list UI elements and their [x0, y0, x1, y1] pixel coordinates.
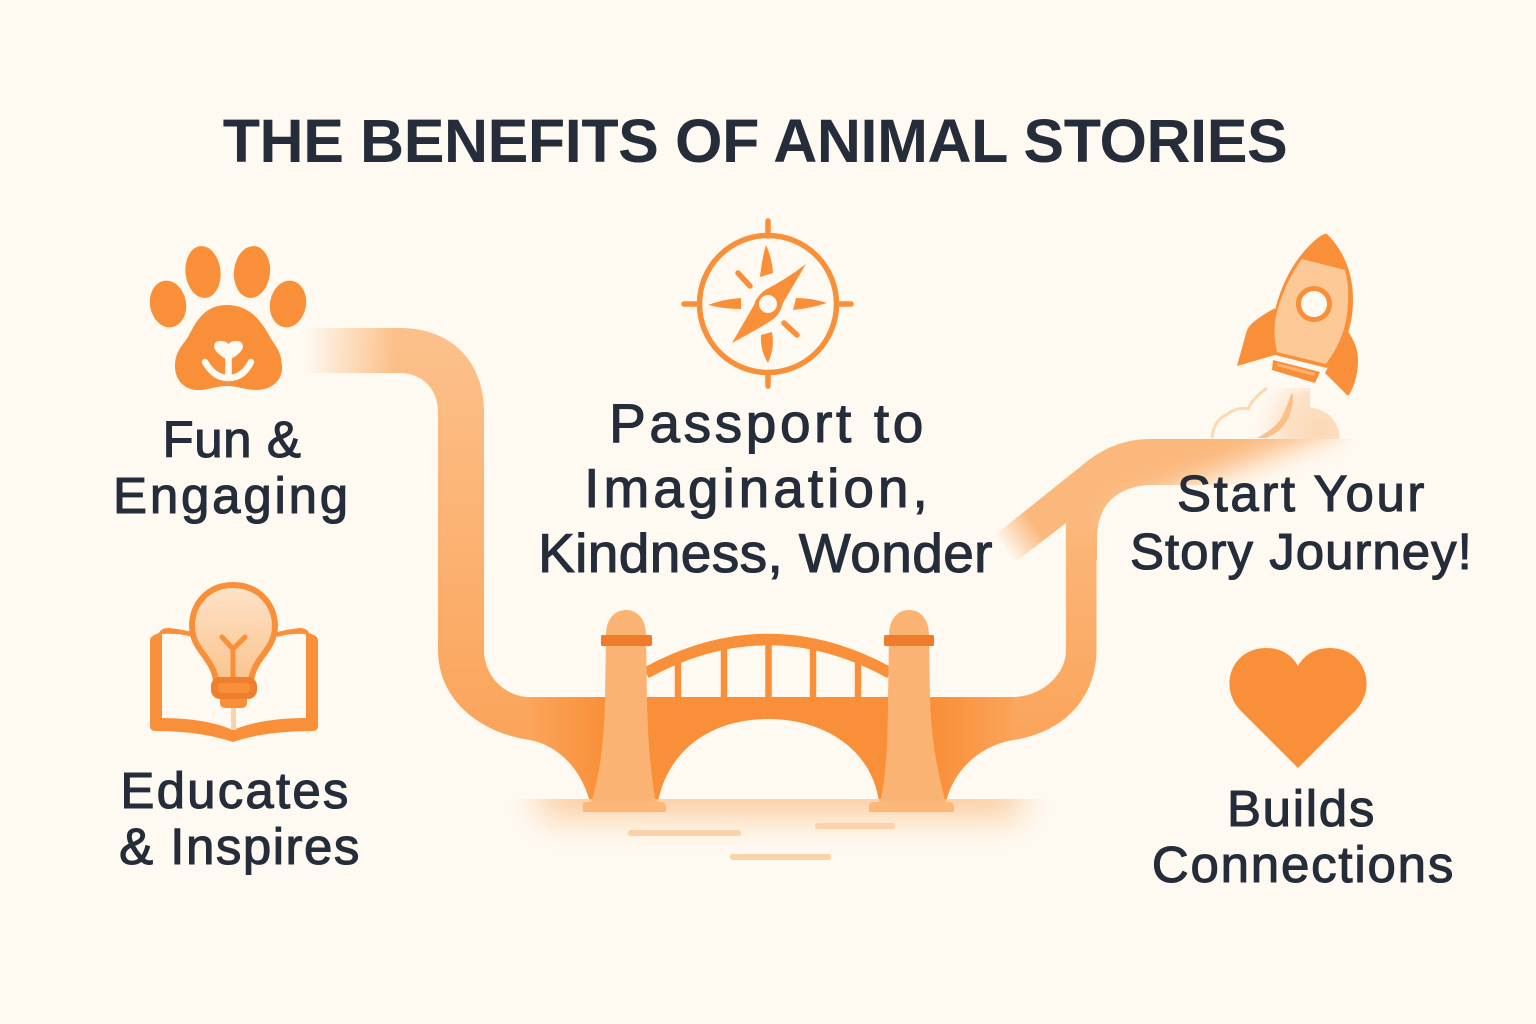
bridge	[530, 610, 1020, 860]
label: builds connections	[1152, 780, 1455, 893]
right tower	[869, 610, 954, 812]
left road from paw to bridge	[300, 328, 530, 740]
icon: paw	[146, 244, 310, 390]
label: educates and inspires: & Inspires	[119, 818, 361, 875]
icon: heart	[1229, 648, 1367, 768]
water lines	[628, 823, 895, 860]
label: builds connections: Connections	[1152, 836, 1455, 893]
label: fun and engaging: Fun &	[162, 411, 302, 468]
icon: rocket	[1212, 234, 1358, 439]
bridge arch railing	[646, 638, 890, 698]
label: fun and engaging: Engaging	[113, 467, 351, 524]
label: passport to imagination	[538, 392, 993, 584]
label: builds connections: Builds	[1227, 780, 1376, 837]
label: passport to imagination: Kindness, Wonder	[538, 522, 993, 584]
label: passport to imagination: Imagination,	[584, 457, 932, 519]
water glow	[519, 799, 1041, 840]
icon: book and bulb	[150, 585, 318, 742]
label: passport to imagination: Passport to	[609, 392, 927, 454]
left tower	[583, 610, 666, 812]
right road from bridge to rocket	[996, 439, 1350, 740]
label: start your story journey: Start Your	[1177, 465, 1427, 522]
title: THE BENEFITS OF ANIMAL STORIES	[223, 107, 1287, 175]
label: educates and inspires: Educates	[120, 762, 351, 819]
icon: compass	[684, 221, 851, 386]
label: fun and engaging	[113, 411, 351, 524]
smoke cloud	[1212, 388, 1340, 439]
label: start your story journey: Story Journey!	[1130, 523, 1473, 580]
label: educates and inspires	[119, 762, 361, 875]
label: start your story journey	[1130, 465, 1473, 580]
bridge deck	[530, 697, 1013, 802]
